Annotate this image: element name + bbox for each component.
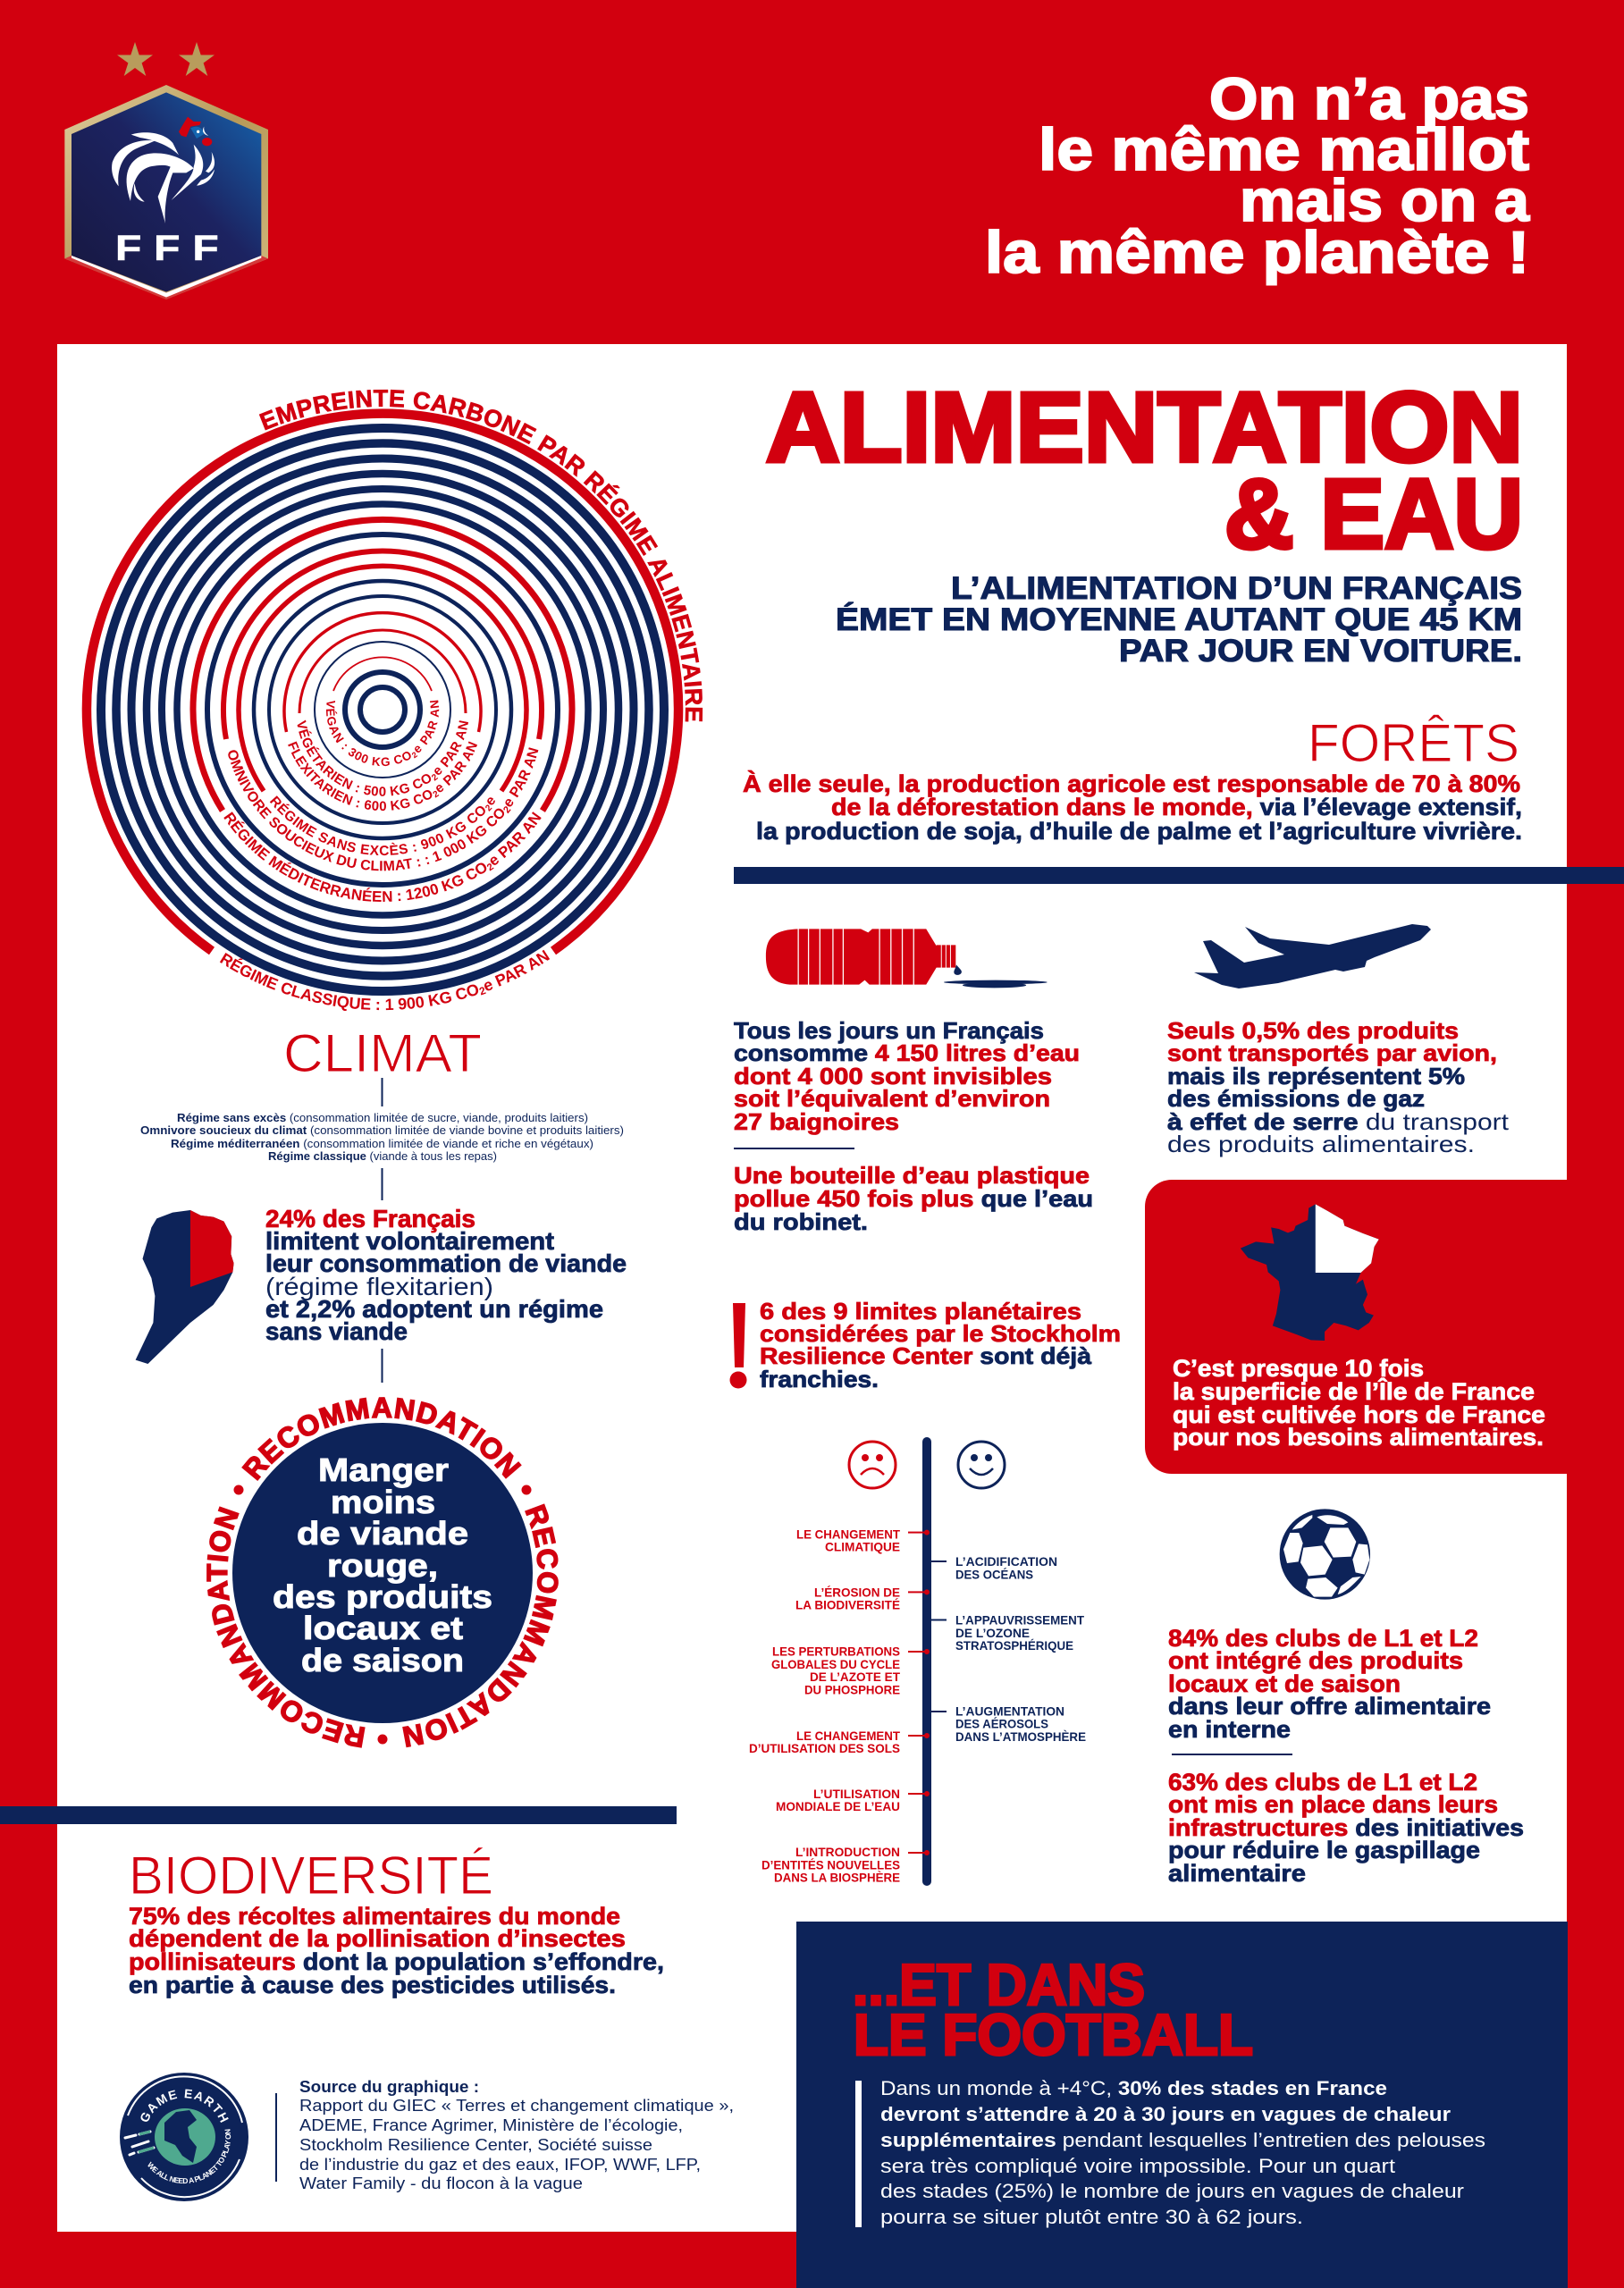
crossed limits labels: MONDIALE DE L’EAU (776, 1799, 900, 1813)
navy disc (232, 1423, 533, 1723)
ring labels: RÉGIME SANS EXCÈS : 900 KG CO (270, 795, 485, 856)
title: slogan: On n’a pas (1209, 65, 1529, 131)
crossed limits labels: DANS LA BIOSPHÈRE (774, 1871, 900, 1885)
text: flexitarian statistic: (régime flexitarien) (265, 1273, 493, 1300)
ring labels: PAR AN (325, 701, 440, 767)
navy ticks (931, 1560, 947, 1712)
text: cultivated area: C’est presque 10 fois (1173, 1355, 1424, 1382)
icon: exclamation mark (729, 1303, 747, 1389)
text: biodiversity: dépendent de la pollinisation d’insectes (129, 1925, 626, 1952)
central axis (922, 1437, 931, 1886)
ring labels: e (490, 856, 499, 865)
ring labels: RÉGIME MÉDITERRANÉEN : 1200 KG CO (223, 812, 542, 902)
ring labels: PAR AN (297, 720, 468, 796)
text: sources: ADEME, France Agrimer, Ministère de l’écologie, (299, 2116, 683, 2134)
title: slogan (985, 65, 1530, 285)
crossed limits labels: DU PHOSPHORE (804, 1682, 900, 1696)
text: plane fact: des émissions de gaz (1167, 1085, 1425, 1112)
safe limits labels: DANS L’ATMOSPHÈRE (955, 1729, 1086, 1744)
icon: sad face (849, 1442, 896, 1488)
text: flexitarian statistic: sans viande (265, 1317, 408, 1345)
ring labels: 2 (411, 753, 418, 758)
heading: FORÊTS: FORÊTS (1308, 713, 1519, 773)
text: clubs waste: ont mis en place dans leurs (1168, 1791, 1498, 1818)
ring labels: PAR AN (220, 949, 551, 1011)
logo: Game Earth: GAME EARTH (141, 2090, 229, 2123)
heading: ...ET DANS (853, 1952, 1145, 2017)
text: water consumption: 27 baignoires (734, 1108, 899, 1135)
text: clubs waste: pour réduire le gaspillage (1168, 1837, 1480, 1863)
body text: des stades (25%) le nombre de jours en vagues de chaleur (880, 2180, 1464, 2202)
text: flexitarian statistic: 24% des Français (265, 1205, 475, 1232)
text: planetary limits (760, 1298, 1121, 1392)
text: sources: Stockholm Resilience Center, Société suisse (299, 2136, 652, 2154)
short divider (1172, 1754, 1292, 1755)
ring labels: FLEXITARIEN : 600 KG CO (288, 742, 477, 812)
body text: Dans un monde à +4°C, 30% des stades en France (880, 2077, 1387, 2099)
icon: plastic bottle (766, 927, 1048, 988)
crossed limits labels: D’UTILISATION DES SOLS (749, 1741, 900, 1755)
text: plastic bottle fact: pollue 450 fois plus que l’eau (734, 1185, 1093, 1212)
ring labels: 2 (503, 806, 511, 813)
text: subtitle (836, 571, 1522, 669)
FFF lettering: FFF (115, 229, 219, 268)
crossed limits labels: LES PERTURBATIONS (772, 1644, 900, 1659)
text: plane fact (1167, 1017, 1510, 1157)
ring labels: OMNIVORE SOUCIEUX DU CLIMAT : : 1 000 KG CO (228, 747, 538, 871)
text: sources (299, 2078, 734, 2192)
safe limits labels: L’AUGMENTATION (955, 1703, 1064, 1718)
circular text (206, 1397, 559, 1748)
crossed limits labels: LE CHANGEMENT (796, 1729, 900, 1743)
ring labels: PAR AN (288, 742, 477, 812)
icon: map of France (1241, 1204, 1379, 1341)
panel: red rounded box France (1145, 1180, 1567, 1474)
text: water consumption: soit l’équivalent d’environ (734, 1085, 1050, 1112)
text: diet legend: Régime méditerranéen (consommation limitée de viande et riche en végétaux) (171, 1137, 593, 1150)
text: planetary limits: Resilience Center sont déjà (760, 1342, 1092, 1369)
safe limits labels: DE L’OZONE (955, 1626, 1030, 1640)
panel: white content area (57, 344, 1567, 2232)
logo: Game Earth (120, 2073, 248, 2201)
ring labels: PAR AN (228, 747, 538, 871)
title: slogan: la même planète ! (985, 219, 1529, 285)
text: plane fact: des produits alimentaires. (1167, 1131, 1475, 1157)
recommendation message: rouge, (327, 1547, 438, 1584)
crossed limits labels: DE L’AZOTE ET (810, 1670, 900, 1684)
text: subtitle: ÉMET EN MOYENNE AUTANT QUE 45 KM (836, 601, 1522, 637)
safe limits labels: L’ACIDIFICATION (955, 1554, 1057, 1569)
recommendation message: locaux et (303, 1610, 463, 1646)
ring labels: e (434, 767, 442, 775)
icon: shield with rooster (64, 85, 268, 299)
heading: LE FOOTBALL (854, 2002, 1253, 2067)
text: sources: Rapport du GIEC « Terres et changement climatique », (299, 2097, 734, 2115)
text: water consumption (734, 1017, 1080, 1135)
text: diet legend: Régime sans excès (consommation limitée de sucre, viande, produits laitiers) (177, 1111, 588, 1124)
ring labels: 2 (479, 987, 486, 996)
ring labels: 2 (432, 774, 438, 781)
ring labels: 2 (485, 804, 492, 812)
icon: two gold stars (117, 42, 215, 76)
text: clubs waste: alimentaire (1168, 1860, 1306, 1887)
recommendation message: de viande (297, 1515, 468, 1552)
connector (381, 1349, 383, 1383)
text: clubs waste (1168, 1769, 1524, 1887)
crossed limits labels: LA BIODIVERSITÉ (795, 1598, 900, 1612)
chart title on arc: EMPREINTE CARBONE PAR RÉGIME ALIMENTAIRE (259, 390, 703, 722)
ring labels: e (484, 981, 493, 990)
text: clubs local food: en interne (1168, 1716, 1291, 1743)
short divider (734, 1148, 854, 1149)
text: forests: de la déforestation dans le monde, via l’élevage extensif, (831, 794, 1522, 820)
ring labels: PAR AN (223, 812, 542, 902)
text: biodiversity: en partie à cause des pesticides utilisés. (129, 1972, 616, 1998)
crossed limits labels (749, 1527, 900, 1885)
text: forests (743, 770, 1522, 845)
text: plastic bottle fact: du robinet. (734, 1208, 868, 1235)
ring labels: e (487, 797, 495, 804)
circular text: RECOMMANDATION (241, 1397, 522, 1481)
heading: CLIMAT: CLIMAT (283, 1023, 482, 1083)
ring labels: e (415, 745, 422, 753)
ring labels: 2 (433, 790, 440, 798)
text: clubs local food: 84% des clubs de L1 et L2 (1168, 1625, 1478, 1652)
text: diet legend: Régime classique (viande à tous les repas) (268, 1149, 497, 1163)
panel: et dans le football (796, 1922, 1568, 2288)
divider bar right (734, 867, 1624, 884)
text: clubs local food: ont intégré des produits (1168, 1647, 1463, 1674)
circular text: RECOMMANDATION (402, 1503, 559, 1748)
text: diet legend (140, 1111, 624, 1163)
heading: ALIMENTATION & EAU: & EAU (1224, 459, 1523, 569)
red ticks (908, 1530, 930, 1855)
chart: concentric carbon footprint rings (82, 390, 703, 1011)
divider bar left (0, 1806, 677, 1824)
icon: happy face (958, 1442, 1005, 1488)
text: forests: À elle seule, la production agricole est responsable de 70 à 80% (743, 770, 1520, 797)
safe limits labels: L’APPAUVRISSEMENT (955, 1612, 1084, 1627)
recommendation message: Manger (318, 1451, 449, 1488)
heading (853, 1952, 1253, 2067)
text: plane fact: à effet de serre du transport (1167, 1108, 1510, 1135)
text: clubs waste: 63% des clubs de L1 et L2 (1168, 1769, 1477, 1796)
text: cultivated area: qui est cultivée hors de France (1173, 1401, 1545, 1428)
text: clubs local food (1168, 1625, 1491, 1743)
heading: ALIMENTATION & EAU: ALIMENTATION (766, 373, 1523, 483)
text: clubs waste: infrastructures des initiatives (1168, 1814, 1524, 1841)
text: flexitarian statistic (265, 1205, 627, 1345)
text: clubs local food: dans leur offre alimentaire (1168, 1693, 1491, 1720)
text: plane fact: Seuls 0,5% des produits (1167, 1017, 1459, 1044)
text: plane fact: mais ils représentent 5% (1167, 1063, 1465, 1089)
text: sources: Water Family - du flocon à la vague (299, 2174, 583, 2192)
ring labels: RÉGIME CLASSIQUE : 1 900 KG CO (220, 949, 551, 1011)
ring labels (220, 701, 551, 1011)
text: biodiversity: 75% des récoltes alimentaires du monde (129, 1903, 620, 1930)
ring labels: 2 (486, 863, 494, 871)
crossed limits labels: L’UTILISATION (813, 1787, 900, 1801)
heading: ALIMENTATION & EAU (766, 373, 1523, 569)
red open arcs (87, 414, 678, 951)
crossed limits labels: D’ENTITÉS NOUVELLES (762, 1857, 900, 1872)
text: flexitarian statistic: limitent volontairement (265, 1227, 554, 1255)
icon: steak-shaped quarter chart (136, 1210, 234, 1364)
text: plane fact: sont transportés par avion, (1167, 1039, 1497, 1066)
title: slogan: le même maillot (1039, 116, 1529, 182)
text: cultivated area: la superficie de l’Île de France (1173, 1377, 1535, 1405)
circular text: RECOMMANDATION (206, 1506, 366, 1748)
recommendation message: moins (331, 1484, 435, 1520)
text: biodiversity: pollinisateurs dont la population s’effondre, (129, 1948, 664, 1975)
chart: planetary limits (729, 1298, 1121, 1886)
crossed limits labels: L’INTRODUCTION (795, 1845, 900, 1859)
text: planetary limits: 6 des 9 limites planétaires (760, 1298, 1081, 1325)
logo: Game Earth: WE ALL NEED A PLANET TO PLAY ON (147, 2129, 231, 2184)
text: water consumption: Tous les jours un Français (734, 1017, 1044, 1044)
separator (275, 2093, 277, 2182)
separators (234, 1485, 531, 1745)
text: biodiversity (129, 1903, 664, 1998)
body text: pourra se situer plutôt entre 30 à 62 jours. (880, 2206, 1303, 2228)
icon: football (1280, 1509, 1370, 1600)
ring labels: VÉGAN : 300 KG CO (325, 701, 440, 767)
body text: sera très compliqué voire impossible. Pour un quart (880, 2155, 1395, 2177)
text: water consumption: consomme 4 150 litres d’eau (734, 1039, 1080, 1066)
navy full rings (101, 428, 664, 991)
text: planetary limits: considérées par le Stockholm (760, 1320, 1121, 1347)
title: slogan: mais on a (1240, 167, 1530, 233)
safe limits labels (955, 1554, 1086, 1744)
text: plastic bottle fact (734, 1162, 1093, 1235)
text: plastic bottle fact: Une bouteille d’eau plastique (734, 1162, 1090, 1189)
text: flexitarian statistic: et 2,2% adoptent un régime (265, 1295, 603, 1323)
ring labels: VÉGÉTARIEN : 500 KG CO (297, 720, 468, 796)
text: sources: Source du graphique : (299, 2078, 479, 2096)
safe limits labels: STRATOSPHÉRIQUE (955, 1638, 1073, 1653)
recommendation message: des produits (273, 1578, 492, 1615)
safe limits labels: DES OCÉANS (955, 1567, 1033, 1581)
text: planetary limits: franchies. (760, 1366, 879, 1392)
text: subtitle: PAR JOUR EN VOITURE. (1119, 634, 1522, 669)
text: flexitarian statistic: leur consommation de viande (265, 1249, 627, 1277)
crossed limits labels: LE CHANGEMENT (796, 1527, 900, 1541)
ring labels: e (506, 799, 513, 806)
icon: plane (1194, 924, 1431, 988)
crossed limits labels: CLIMATIQUE (825, 1540, 900, 1554)
text: cultivated area (1173, 1355, 1545, 1451)
recommendation message: de saison (301, 1642, 464, 1678)
crossed limits labels: L’ÉROSION DE (814, 1585, 900, 1599)
text: cultivated area: pour nos besoins alimentaires. (1173, 1424, 1544, 1451)
text: forests: la production de soja, d’huile de palme et l’agriculture vivrière. (756, 818, 1522, 845)
text: sources: de l’industrie du gaz et des eaux, IFOP, WWF, LFP, (299, 2156, 701, 2174)
FFF crest (64, 42, 268, 299)
body text (880, 2077, 1485, 2228)
recommendation message (273, 1451, 492, 1678)
body text: devront s’attendre à 20 à 30 jours en vagues de chaleur (880, 2103, 1451, 2125)
text: diet legend: Omnivore soucieux du climat (consommation limitée de viande bovine et produits laitiers) (140, 1123, 624, 1137)
white side bar (855, 2081, 862, 2227)
connector (381, 1078, 383, 1106)
body text: supplémentaires pendant lesquelles l’entretien des pelouses (880, 2129, 1485, 2151)
text: clubs local food: locaux et de saison (1168, 1670, 1401, 1697)
safe limits labels: DES AÉROSOLS (955, 1717, 1048, 1731)
text: water consumption: dont 4 000 sont invisibles (734, 1063, 1052, 1089)
crossed limits labels: GLOBALES DU CYCLE (771, 1657, 900, 1671)
heading: BIODIVERSITÉ: BIODIVERSITÉ (129, 1846, 493, 1905)
ring labels: e (436, 785, 443, 792)
callout: recommendation badge (206, 1397, 559, 1748)
text: subtitle: L’ALIMENTATION D’UN FRANÇAIS (951, 571, 1522, 606)
connector (381, 1168, 383, 1200)
